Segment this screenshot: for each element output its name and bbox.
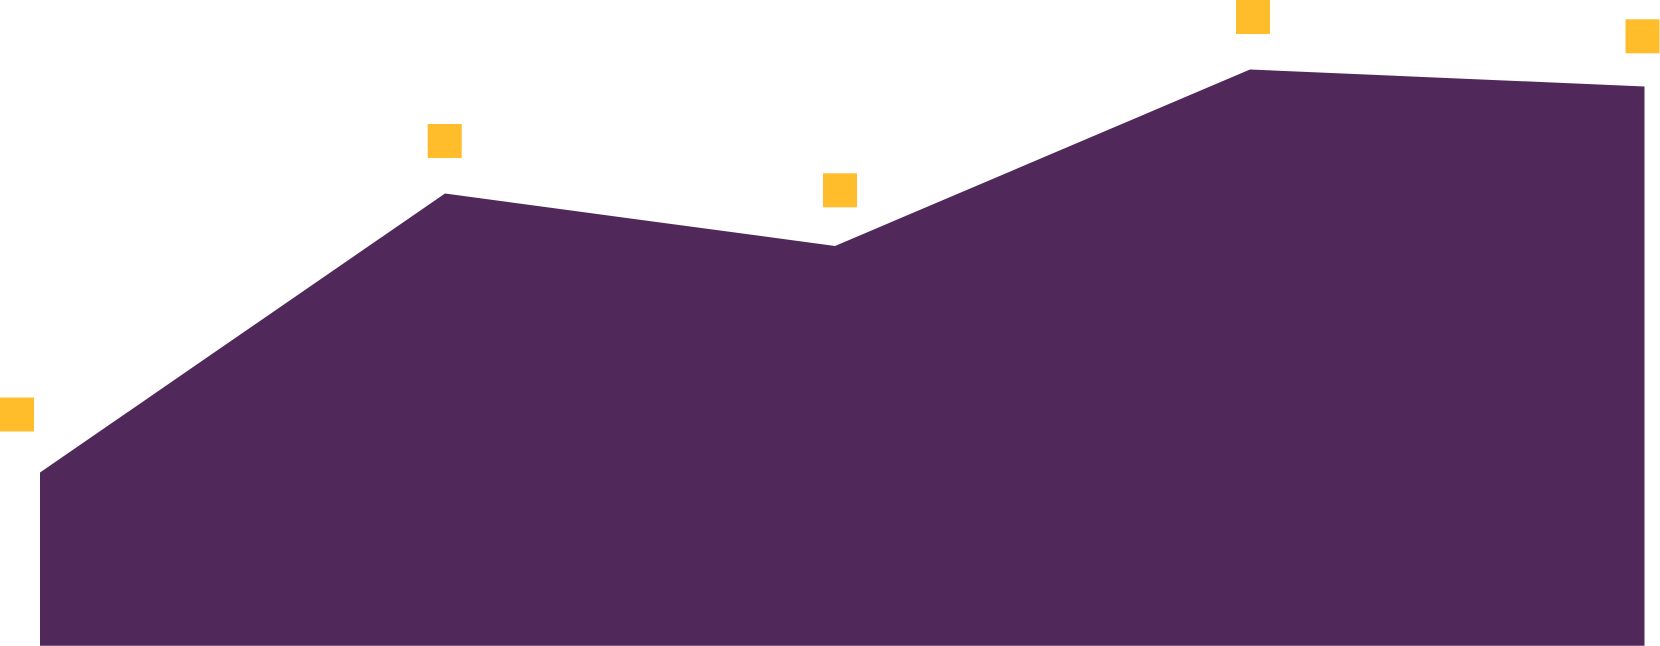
data point marker 5: [1626, 19, 1660, 53]
data point marker 1: [0, 398, 34, 432]
data point marker 2: [428, 124, 462, 158]
data point marker 3: [823, 173, 857, 207]
data point marker 4: [1236, 0, 1270, 34]
